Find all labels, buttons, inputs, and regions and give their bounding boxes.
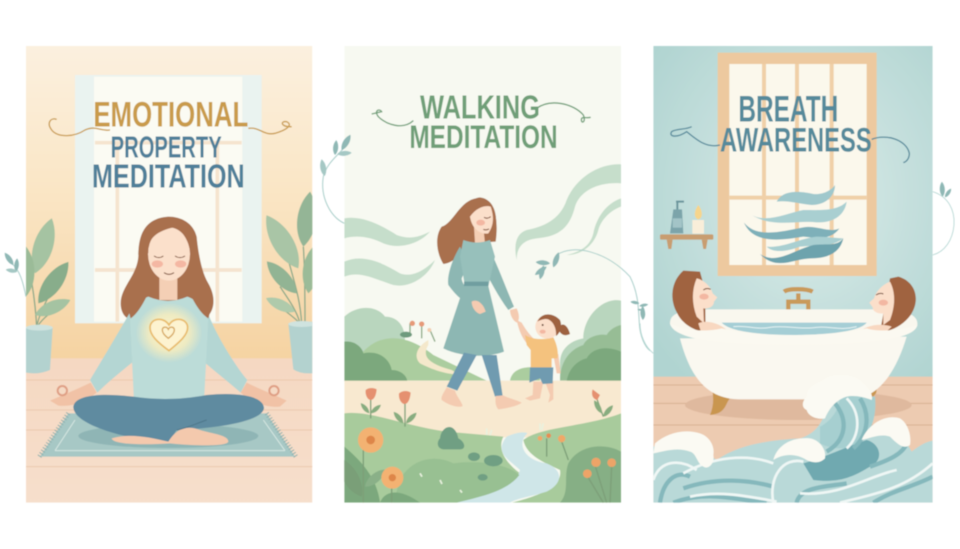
title: breath awareness [671,89,909,163]
title: emotional property meditation: MEDITATION [92,159,245,196]
flowers [332,388,616,503]
paper background [344,46,621,503]
title: breath awareness: BREATH [738,89,838,130]
vine: right of panel two [533,250,650,351]
title: walking meditation [371,94,592,149]
potted plant right [266,192,313,374]
walking child [517,314,570,403]
bath faucet [784,289,813,313]
meditating woman [50,217,287,445]
title: emotional property meditation: EMOTIONAL [93,96,248,135]
title: walking meditation: WALKING [420,89,540,126]
sandy path [344,381,621,437]
panel: breath awareness [637,46,954,503]
foreground meadow and stream [344,413,621,503]
title: walking meditation: MEDITATION [409,118,558,155]
bathroom floor [652,376,934,460]
vine: left of panel one [3,251,26,297]
bathroom wall [653,46,933,379]
woman bathing left [672,271,730,334]
panel: walking meditation [319,46,650,503]
panel: emotional property meditation [3,46,321,503]
wall background [26,46,312,359]
breath wave ribbons [744,185,847,263]
vine: left of panel two [319,133,353,223]
walking woman [437,197,522,409]
clawfoot bathtub body [670,309,917,420]
shelf with soap and candle [660,202,713,249]
vine: right of panel three [933,182,954,255]
bathroom window [718,53,877,276]
title: emotional property meditation [48,101,292,188]
background hills and bushes [344,300,621,382]
window with curtain [75,75,262,323]
bathtub front rim [697,328,890,335]
title: emotional property meditation: PROPERTY [111,131,222,165]
vine: left of panel three [637,309,653,353]
wooden floor [26,358,312,503]
title: breath awareness: AWARENESS [720,122,872,160]
woman bathing right [864,276,916,331]
potted plant left [25,218,70,374]
ocean waves [653,393,934,504]
breeze ribbons [344,164,621,286]
yoga mat [39,413,296,457]
